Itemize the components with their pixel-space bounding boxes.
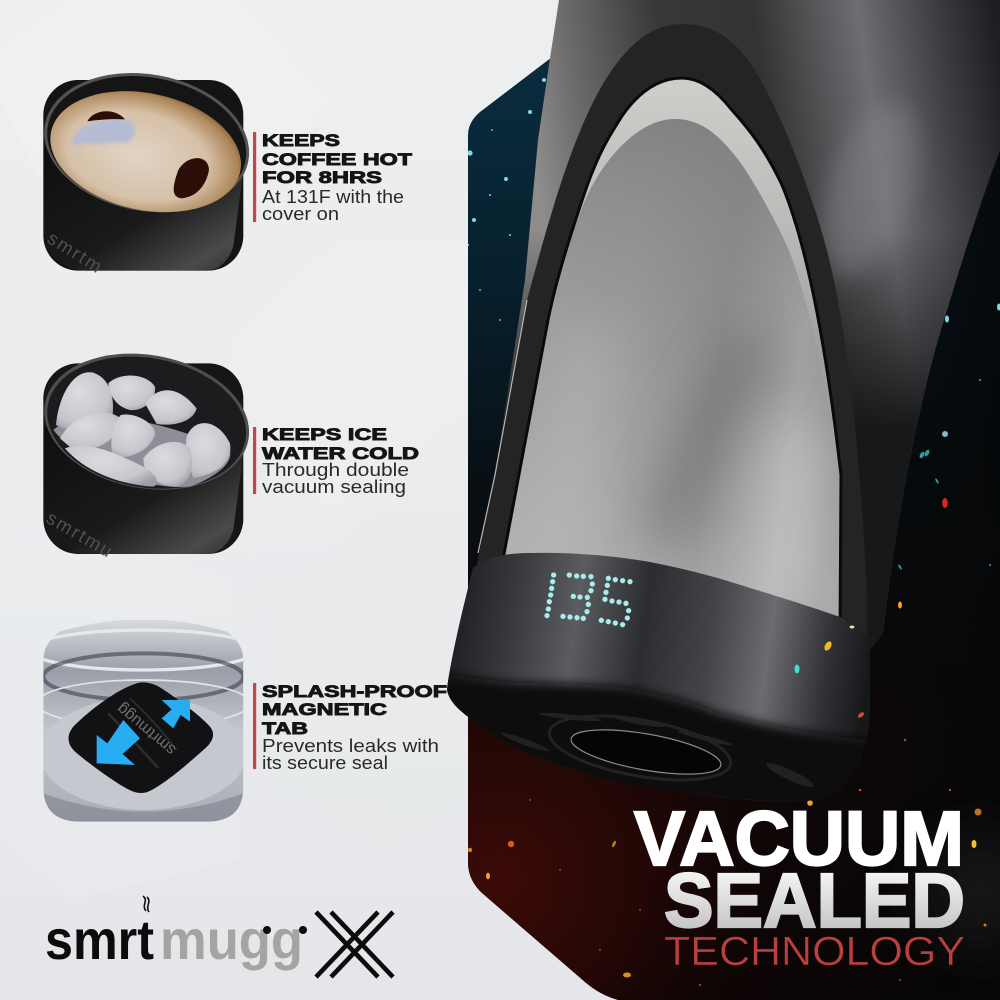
collar [447,552,870,802]
collar sparks [794,626,865,719]
bottle [430,0,1000,820]
callout: splash-proof magnetic tab: MAGNETIC [262,700,387,719]
blue arrow down-left [97,720,140,765]
body left highlight line [478,300,527,553]
title line: vacuum: VACUUM [634,796,964,882]
callout: splash-proof magnetic tab: its secure seal [262,753,388,773]
window edge line [501,78,841,640]
LED readout 135 [544,572,633,627]
photo: coffee mug [33,57,260,278]
callout: keeps ice water cold: Through double [262,460,409,480]
logo: smrtmugg X [45,896,393,977]
clear lid [43,620,244,822]
callout: splash-proof magnetic tab: Prevents leaks with [262,736,439,756]
icon: steam [143,896,149,912]
callout: splash-proof magnetic tab: TAB [262,719,308,738]
callout: keeps ice water cold [253,425,419,497]
title line: sealed: SEALED [664,858,965,944]
X mark [316,912,393,977]
mug body [44,143,245,271]
mug body [44,427,245,554]
wordmark: mugg [160,908,303,971]
callout: keeps coffee hot [253,131,413,224]
callout: keeps ice water cold: vacuum sealing [262,477,406,497]
photo: magnetic tab lid [43,620,244,822]
orange sparks [468,498,986,986]
mug rim [33,57,260,228]
black tab [69,682,213,793]
callout: keeps coffee hot: At 131F with the [262,187,404,207]
callout: keeps coffee hot: cover on [262,204,339,224]
mug logo lettering: smrtm [44,227,107,278]
cyan sparks [467,78,1000,570]
photo: ice water mug [33,338,260,562]
subtitle: technology: TECHNOLOGY [664,928,965,974]
logo dots [263,926,307,934]
water [53,417,230,487]
callout: splash-proof magnetic tab: SPLASH-PROOF [262,682,447,701]
blue arrow up-right [162,700,190,728]
bottom ring [570,729,722,775]
callout: keeps coffee hot: COFFEE HOT [262,150,413,169]
ice cubes [56,372,230,487]
wordmark: smrt [45,908,154,971]
mug logo lettering: smrtmu [43,507,118,562]
callout: keeps coffee hot: KEEPS [262,131,340,150]
callout: keeps ice water cold: KEEPS ICE [262,425,387,444]
headline: vacuum sealed technology [634,796,965,974]
callout: keeps coffee hot: FOR 8HRS [262,168,382,187]
dark coffee spots [87,111,125,121]
black band around window [476,24,867,640]
callout: splash-proof magnetic tab [253,682,447,773]
callout: keeps ice water cold: WATER COLD [262,444,419,463]
reflection [72,119,135,145]
coffee foam [39,75,252,229]
bottle body [460,0,1000,660]
steel window [505,80,840,616]
mug rim [33,338,260,505]
bottom embossed text marks [500,711,816,791]
tab logo lettering: smrtmugg [114,700,179,758]
panel: dark hexagon space background [460,0,1000,1000]
